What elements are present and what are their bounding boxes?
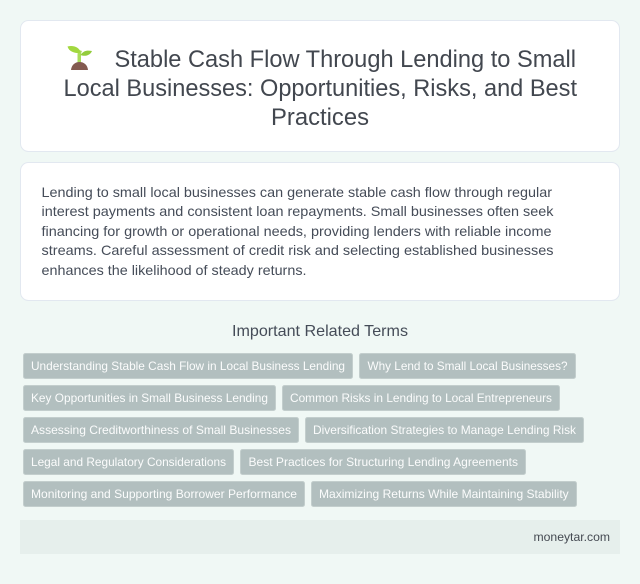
tag — [24, 354, 352, 378]
footer bar — [20, 520, 620, 554]
tag — [24, 418, 298, 442]
tag: Understanding Stable Cash Flow in Local Business Lending — [31, 359, 345, 373]
tag: Legal and Regulatory Considerations — [31, 455, 226, 469]
panel: title card — [20, 20, 620, 152]
footer bar: moneytar.com — [534, 530, 610, 544]
tag — [282, 386, 560, 410]
description text: interest payments and consistent loan repayments. Small businesses often seek — [42, 203, 555, 219]
description text — [42, 184, 555, 278]
description text: streams. Careful assessment of credit risk and selecting established businesses — [42, 242, 554, 258]
description text: enhances the likelihood of steady returns. — [42, 262, 306, 278]
tag: Assessing Creditworthiness of Small Businesses — [31, 423, 291, 437]
tag: Monitoring and Supporting Borrower Performance — [31, 487, 297, 501]
tags list — [24, 354, 584, 506]
title text: Local Businesses: Opportunities, Risks, and Best — [64, 75, 577, 102]
panel: description card — [20, 162, 620, 300]
tag — [360, 354, 576, 378]
description text: financing for growth or operational needs, providing lenders with reliable income — [42, 223, 552, 239]
description text: Lending to small local businesses can generate stable cash flow through regular — [42, 184, 552, 200]
tag: Why Lend to Small Local Businesses? — [368, 359, 568, 373]
tag — [306, 418, 584, 442]
tag — [24, 386, 276, 410]
tag — [240, 450, 526, 474]
icon: seedling — [68, 46, 92, 70]
tag: Best Practices for Structuring Lending Agreements — [248, 455, 518, 469]
tag: Key Opportunities in Small Business Lending — [31, 391, 268, 405]
tag — [312, 482, 576, 506]
title text: Stable Cash Flow Through Lending to Small — [114, 46, 576, 73]
tag — [24, 450, 234, 474]
tag: Common Risks in Lending to Local Entrepreneurs — [290, 391, 552, 405]
tag: Maximizing Returns While Maintaining Stability — [319, 487, 569, 501]
heading: important related terms: Important Related Terms — [232, 323, 408, 340]
title text — [64, 46, 577, 131]
tag: Diversification Strategies to Manage Lending Risk — [313, 423, 577, 437]
title text: Practices — [271, 104, 369, 131]
tag — [24, 482, 304, 506]
